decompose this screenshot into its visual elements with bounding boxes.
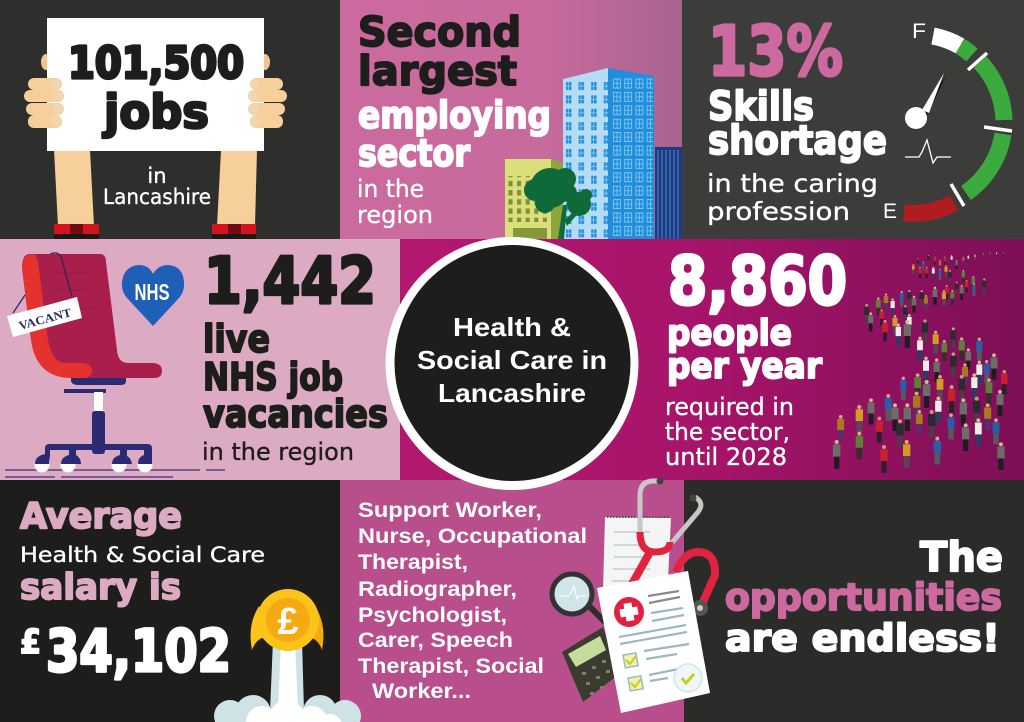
heading: the opportunities are endless <box>725 533 1003 660</box>
text: in the region: region <box>357 201 433 229</box>
text: in the caring profession: profession <box>707 197 850 226</box>
heading: second largest <box>358 8 521 95</box>
heading: the opportunities are endless: The <box>920 533 1003 581</box>
icon: NHS heart <box>122 265 184 326</box>
centre badge: health and social care in Lancashire: Social Care in <box>417 345 607 375</box>
text: in the region: in the <box>357 175 424 203</box>
panel: average salary <box>0 480 340 722</box>
icon: fuel gauge: E <box>883 200 897 223</box>
heading: skills shortage <box>708 84 887 164</box>
centre badge: health and social care in Lancashire: Health & <box>453 312 571 342</box>
text: list of roles: Carer, Speech <box>358 629 513 652</box>
centre badge: health and social care in Lancashire: Lancashire <box>438 378 586 408</box>
text: in Lancashire: Lancashire <box>103 185 211 209</box>
text: required in the sector until 2028: until 2028 <box>665 443 787 471</box>
centre badge: health and social care in Lancashire <box>386 237 638 490</box>
heading: employing sector: employing <box>358 94 551 137</box>
text: required in the sector until 2028 <box>665 393 794 471</box>
panel: 101,500 jobs <box>0 0 340 239</box>
heading: skills shortage: shortage <box>708 118 887 164</box>
figure: 34,102 pounds: £ <box>20 622 41 661</box>
heading: second largest: Second <box>358 8 521 56</box>
sign board <box>47 18 264 151</box>
text: list of roles <box>358 499 587 703</box>
panel: job roles list <box>340 480 684 722</box>
heading: the opportunities are endless: opportunities <box>725 576 1002 619</box>
text: list of roles: Psychologist, <box>358 604 507 627</box>
illustration: winding queue of people <box>833 252 1008 473</box>
text: in Lancashire: in <box>147 164 167 188</box>
heading: people per year: per year <box>667 346 822 387</box>
icon: magnifying glass <box>552 574 605 622</box>
heading: the opportunities are endless: are endless! <box>725 617 1000 660</box>
icon: NHS heart: NHS <box>134 279 170 305</box>
text: list of roles: Nurse, Occupational <box>358 525 587 548</box>
panel: second largest employing sector <box>340 0 682 239</box>
text: list of roles: Therapist, <box>358 551 468 574</box>
panel: skills shortage <box>682 0 1024 239</box>
hands <box>24 78 287 128</box>
icon: buildings <box>505 68 682 239</box>
heading: 13%: 13% <box>708 12 843 92</box>
notepad <box>603 517 671 590</box>
heading: average: Average <box>20 496 182 537</box>
heading: 101,500 jobs: 101,500 <box>68 38 244 89</box>
panel: people per year <box>400 239 1024 480</box>
text: in the caring profession <box>707 169 878 226</box>
icon: fuel gauge <box>883 20 1012 223</box>
figure: 34,102 pounds: 34,102 <box>46 617 231 685</box>
text: list of roles: Therapist, Social <box>358 655 544 678</box>
text: in the region <box>357 175 433 229</box>
heading: live NHS job vacancies: NHS job <box>203 355 343 399</box>
icon: vacant office chair <box>5 253 225 477</box>
label: vacant tag <box>7 297 82 337</box>
heading: people per year: people <box>667 313 792 354</box>
heading: skills shortage: Skills <box>708 84 814 130</box>
text: list of roles: Radiographer, <box>358 578 517 601</box>
heading: employing sector: sector <box>358 132 471 175</box>
text: in Lancashire <box>103 164 211 209</box>
heading: salary is: salary is <box>20 567 181 608</box>
heading: 8,860: 8,860 <box>668 242 847 320</box>
text: required in the sector until 2028: the sector, <box>665 418 790 446</box>
icon: checklist document <box>597 571 710 713</box>
heading: second largest: largest <box>358 47 517 95</box>
icon: calculator <box>562 627 618 702</box>
text: required in the sector until 2028: required in <box>665 393 794 421</box>
text: list of roles: Worker... <box>372 680 471 703</box>
heading: 101,500 jobs: jobs <box>102 85 209 139</box>
panel: NHS job vacancies <box>0 239 400 480</box>
text: in the caring profession: in the caring <box>707 169 878 198</box>
heading: 101,500 jobs <box>68 38 244 139</box>
heading: people per year <box>667 313 822 387</box>
icon: fuel gauge: F <box>912 20 926 43</box>
heading: live NHS job vacancies: vacancies <box>203 392 388 436</box>
text: list of roles: Support Worker, <box>358 499 542 522</box>
text: in the region: in the region <box>202 438 354 466</box>
illustration: medical paperwork and stethoscope <box>552 478 715 713</box>
icon: pound coin rocket <box>214 589 361 722</box>
text: health and social care: Health & Social Care <box>20 543 265 567</box>
heading: employing sector <box>358 94 551 175</box>
icon: stethoscope <box>632 478 715 616</box>
heading: live NHS job vacancies <box>203 317 388 436</box>
icon: pound coin rocket: £ <box>277 601 299 643</box>
label: vacant tag: VACANT <box>17 305 73 333</box>
heading: 1,442: 1,442 <box>204 245 376 319</box>
heading: live NHS job vacancies: live <box>203 317 270 361</box>
panel: the opportunities are endless <box>684 480 1024 722</box>
arms <box>41 54 270 239</box>
